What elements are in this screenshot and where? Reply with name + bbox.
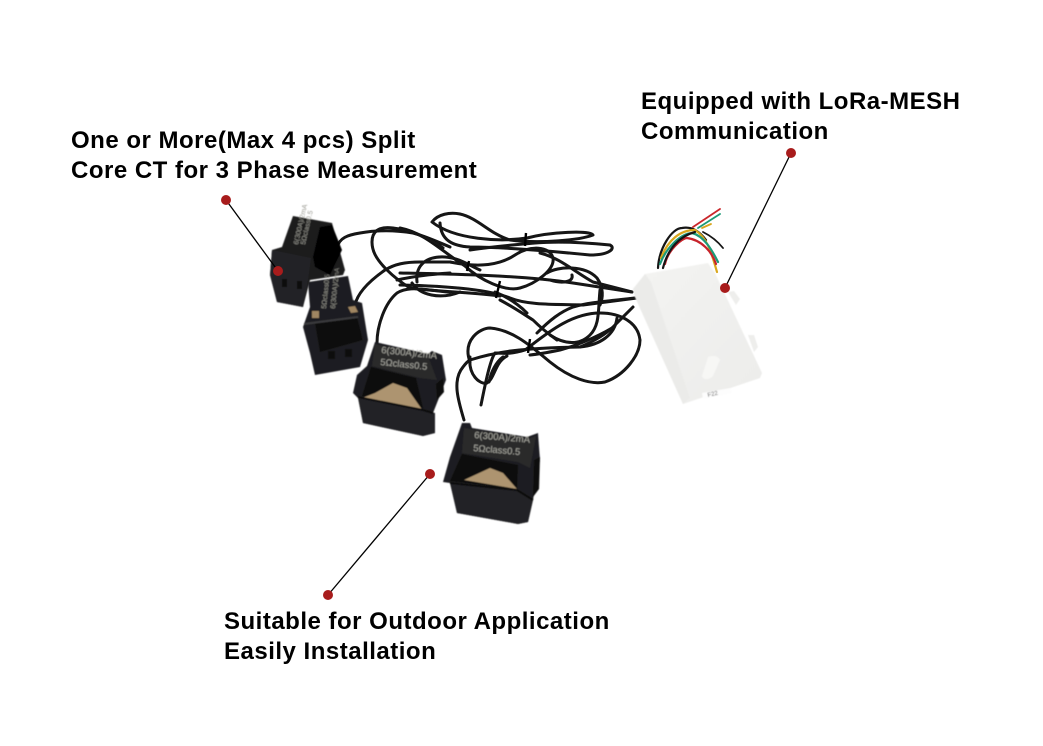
caption: outdoor application [224, 608, 610, 665]
LoRa module [633, 263, 762, 404]
current transformer 3 [353, 342, 446, 436]
callout leader: outdoor [323, 469, 435, 600]
cable ties [467, 233, 530, 353]
caption: outdoor application: Easily Installation [224, 638, 436, 665]
caption: communication: Communication [641, 118, 829, 145]
caption: communication [641, 88, 960, 145]
caption: communication: Equipped with LoRa-MESH [641, 88, 960, 115]
caption: outdoor application: Suitable for Outdoor Application [224, 608, 610, 635]
callout leader: CT [221, 195, 283, 276]
current transformer 1 [270, 203, 345, 307]
current transformer 2: 5Ωclass0.5 [321, 274, 332, 309]
current transformer 4: 6(300A)/2mA [474, 430, 531, 446]
callout leader: communication [720, 148, 796, 293]
current transformer 1: 5Ωclass0.5 [300, 210, 315, 245]
current transformer 1: 6(300A)/2mA [293, 203, 309, 245]
colored wires [658, 209, 723, 272]
caption: split core CT: One or More(Max 4 pcs) Split [71, 127, 416, 154]
current transformer 4 [443, 423, 540, 524]
caption: split core CT [71, 127, 477, 184]
current transformer 3: 5Ωclass0.5 [380, 357, 428, 373]
current transformer 2 [303, 267, 368, 375]
current transformer 2: 6(300A)/2mA [330, 267, 341, 309]
caption: split core CT: Core CT for 3 Phase Measurement [71, 157, 477, 184]
current transformer 3: 6(300A)/2mA [381, 345, 438, 362]
current transformer 4: 5Ωclass0.5 [473, 443, 521, 458]
LoRa module: F22 [707, 391, 719, 399]
black cable bundle [337, 213, 640, 420]
